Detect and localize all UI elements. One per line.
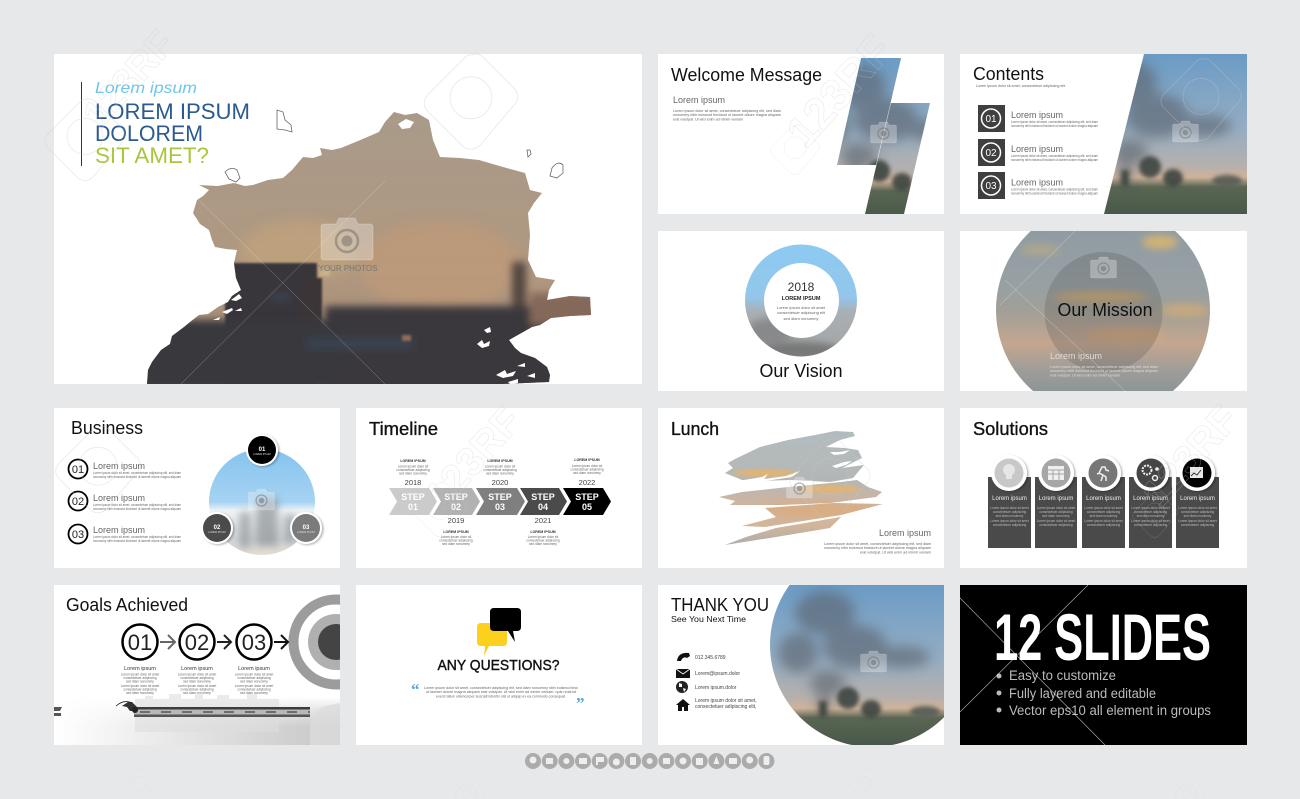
quote text: ut laoreet dolore magna aliquam erat volutpat. Ut wisi enim ad minim veniam, quis nostrud: [426, 690, 576, 694]
icon: camera placeholder: [248, 489, 274, 510]
panel: our mission: [960, 225, 1247, 395]
goal 02: Lorem ipsum dolor sit amet: [178, 684, 216, 688]
node 03: 03: [303, 525, 310, 531]
panel: contents: [960, 54, 1247, 214]
column 5: [1176, 455, 1219, 548]
target graphic: [288, 594, 340, 690]
step 4 arrow: STEP: [531, 492, 555, 502]
heading: ANY QUESTIONS?: [438, 658, 560, 674]
list item 01: [68, 460, 181, 479]
column 1: consectetuer adipiscing: [993, 523, 1026, 527]
contact: website: [676, 681, 737, 693]
photo circle: [770, 585, 944, 745]
column 1: sed diam nonummy: [996, 514, 1024, 518]
watermark lines: [1000, 231, 1125, 391]
step 4 arrow: 04: [538, 502, 548, 512]
column 3: Lorem ipsum dolor sit amet: [1084, 519, 1123, 523]
panel: 12 slides: [960, 585, 1247, 745]
panel: timeline: [356, 408, 642, 568]
goal 02: consectetuer adipiscing: [180, 688, 214, 692]
goal 01: sed diam nonummy: [126, 680, 154, 684]
goal 03: Lorem ipsum dolor sit amet: [235, 684, 273, 688]
list item 02: 02: [72, 496, 84, 508]
goal 03: [235, 624, 288, 695]
watermark: outer stamps: [124, 769, 1206, 799]
icon: speech bubbles: [477, 608, 521, 656]
column 1: [988, 455, 1031, 548]
heading: Our Vision: [760, 361, 842, 381]
icon: camera placeholder: [1172, 121, 1198, 142]
icon: camera placeholder: [1090, 257, 1116, 278]
milestone 2019: LOREM IPSUM: [443, 530, 469, 534]
subheading: Lorem ipsum: [673, 95, 725, 105]
column 3: consectetuer adipiscing: [1087, 510, 1120, 514]
body text: erat volutpat. Ut wisi enim ad minim veniam: [1050, 374, 1120, 378]
inner dark circle: [1044, 252, 1162, 372]
goal 02: [178, 624, 231, 695]
body text: consectetuer adipiscing elit: [777, 310, 826, 315]
column 4: Lorem ipsum dolor sit amet: [1131, 506, 1170, 510]
item 03: nonummy nibh euismod tincidunt ut laoreet dolore magna aliquam: [1011, 192, 1098, 196]
watermark: title slide stamp: 123RF: [75, 23, 183, 136]
column 2: consectetuer adipiscing: [1039, 523, 1073, 527]
list item 01: Lorem ipsum: [93, 461, 145, 471]
heading: THANK YOU: [671, 595, 769, 615]
list item 01: 01: [72, 464, 84, 476]
column 1: Lorem ipsum dolor sit amet: [990, 506, 1029, 510]
column 5: sed diam nonummy: [1184, 514, 1212, 518]
panel: main title slide: [54, 54, 642, 396]
column 4: Lorem ipsum dolor sit amet: [1131, 519, 1170, 523]
item 02: Lorem ipsum: [1011, 144, 1063, 154]
node 02: LOREM IPSUM: [208, 531, 226, 534]
list item 03: nonummy nibh euismod tincidunt ut laoreet dolore magna aliquam: [93, 539, 181, 543]
milestone 2021: [526, 516, 560, 546]
heading: Business: [71, 418, 143, 438]
milestone 2022: LOREM IPSUM: [574, 458, 600, 462]
milestone 2018: sed diam nonummy: [399, 472, 427, 476]
quote text: exerci tation ullamcorper suscipit lobortis nisl ut aliquip ex ea commodo consequat.: [436, 694, 566, 698]
watermark: top right stamps: [770, 26, 1241, 175]
heading: Contents: [973, 64, 1044, 84]
step 3 arrow: [476, 488, 525, 515]
panel: goals achieved: [54, 585, 340, 745]
photo circle: [996, 231, 1210, 391]
column 5: Lorem ipsum: [1180, 496, 1215, 502]
list item 01: nonummy nibh euismod tincidunt ut laoreet dolore magna aliquam: [93, 475, 181, 479]
step 2 arrow: STEP: [444, 492, 468, 502]
goal 03: consectetuer adipiscing: [237, 676, 271, 680]
body text: [824, 542, 931, 554]
goal 03: sed diam nonummy: [240, 691, 268, 695]
goal 02: consectetuer adipiscing: [180, 676, 214, 680]
column 5: Lorem ipsum dolor sit amet: [1178, 519, 1217, 523]
node 02: 02: [214, 525, 221, 531]
watermark: middle row stamps: 123RF: [417, 399, 530, 518]
milestone 2018: 2018: [405, 478, 421, 487]
column 2: consectetuer adipiscing: [1039, 510, 1073, 514]
node 01: [246, 434, 278, 466]
quote text: [411, 680, 584, 713]
icon row: [525, 753, 774, 769]
body text: nonummy nibh euismod tincidunt ut laoreet dolore magna aliquam: [673, 113, 781, 117]
body text: nonummy nibh euismod tincidunt ut laoreet dolore magna aliquam: [1050, 369, 1158, 373]
icon: camera placeholder: [860, 651, 886, 672]
body text: Lorem ipsum dolor sit amet, consectetuer adipiscing elit, sed diam: [824, 542, 931, 546]
milestone 2020: [483, 459, 517, 487]
goal 03: consectetuer adipiscing: [237, 688, 271, 692]
milestone 2019: consectetuer adipiscing: [439, 538, 473, 542]
goal 01: consectetuer adipiscing: [123, 688, 157, 692]
list item 01: Lorem ipsum dolor sit amet, consectetuer adipiscing elit, sed diam: [93, 471, 181, 475]
column 2: Lorem ipsum dolor sit amet: [1037, 506, 1075, 510]
photo circle: [209, 449, 315, 555]
milestone 2022: Lorem ipsum dolor sit: [572, 464, 602, 468]
contact: address: consectetuer adipiscing elit,: [695, 704, 756, 710]
watermark: middle row stamps: [56, 397, 1247, 538]
contact: email: Lorem@ipsum.dolor: [695, 671, 740, 677]
milestone 2021: sed diam nonummy: [529, 542, 557, 546]
label: LOREM IPSUM: [782, 296, 821, 302]
item 01: Lorem ipsum dolor sit amet, consectetuer adipiscing elit, sed diam: [1011, 120, 1098, 124]
body text: [673, 109, 781, 122]
photo ring: [745, 244, 857, 356]
column 5: consectetuer adipiscing: [1181, 510, 1214, 514]
column 4: [1129, 455, 1172, 548]
photo placeholder label: YOUR PHOTOS: [319, 264, 377, 273]
list item 02: nonummy nibh euismod tincidunt ut laoreet dolore magna aliquam: [93, 507, 181, 511]
body text: Lorem ipsum dolor sit amet: [777, 305, 826, 310]
subheading: See You Next Time: [671, 614, 746, 624]
list item 03: [68, 524, 181, 544]
item 02: [978, 139, 1098, 166]
list item 03: 03: [72, 529, 84, 541]
heading: Timeline: [369, 419, 438, 439]
milestone 2021: Lorem ipsum dolor sit: [528, 535, 558, 539]
milestone 2020: consectetuer adipiscing: [483, 468, 517, 472]
panel: business: [54, 408, 340, 568]
photo strips: [837, 56, 930, 214]
car: [116, 702, 138, 713]
watermark: top right stamps: 123RF: [777, 26, 902, 157]
item 01: nonummy nibh euismod tincidunt ut laoreet dolore magna aliquam: [1011, 124, 1098, 128]
photo wedge: [1104, 54, 1247, 214]
column 5: consectetuer adipiscing: [1181, 523, 1214, 527]
column 1: Lorem ipsum: [992, 496, 1027, 502]
milestone 2022: sed diam nonummy: [573, 471, 601, 475]
column 5: Lorem ipsum dolor sit amet: [1178, 506, 1217, 510]
column 3: consectetuer adipiscing: [1087, 523, 1120, 527]
milestone 2019: sed diam nonummy: [442, 542, 470, 546]
title text block: [81, 80, 250, 168]
column 3: Lorem ipsum dolor sit amet: [1084, 506, 1123, 510]
heading: Goals Achieved: [66, 595, 188, 615]
milestone 2020: Lorem ipsum dolor sit: [485, 464, 515, 468]
step 4 arrow: [520, 488, 567, 515]
item 02: 02: [985, 148, 997, 159]
column 4: consectetuer adipiscing: [1134, 523, 1167, 527]
icon: camera placeholder: [321, 218, 373, 260]
node 03: [290, 512, 322, 544]
watermark lines: [181, 181, 385, 384]
milestone 2019: [439, 516, 473, 546]
node 02: [201, 512, 233, 544]
step 2 arrow: 02: [451, 502, 461, 512]
step 1 arrow: 01: [408, 502, 418, 512]
panel: our vision: [658, 231, 944, 391]
column 2: Lorem ipsum dolor sit amet: [1037, 519, 1075, 523]
goal 02: 02: [185, 630, 209, 655]
watermark lines: [960, 585, 1105, 745]
contact: email: [676, 669, 740, 678]
step 1 arrow: [389, 488, 437, 515]
item 02: nonummy nibh euismod tincidunt ut laoreet dolore magna aliquam: [1011, 158, 1098, 162]
column 2: [1035, 455, 1077, 548]
brush photo: [715, 430, 890, 548]
step 3 arrow: 03: [495, 502, 505, 512]
milestone 2018: consectetuer adipiscing: [396, 468, 430, 472]
title text block: LOREM IPSUM: [95, 99, 250, 124]
column 2: Lorem ipsum: [1039, 496, 1073, 502]
milestone 2020: 2020: [492, 478, 508, 487]
quote text: “: [411, 680, 420, 699]
goal 03: Lorem ipsum: [238, 666, 270, 672]
body text: erat volutpat. Ut wisi enim ad minim veniam: [673, 118, 743, 122]
item 01: 01: [985, 114, 997, 125]
column 4: consectetuer adipiscing: [1134, 510, 1167, 514]
goal 01: Lorem ipsum dolor sit amet: [121, 672, 159, 676]
heading: Welcome Message: [671, 65, 822, 85]
body text: erat volutpat. Ut wisi enim ad minim veniam: [860, 550, 931, 554]
panel: thank you: [658, 585, 944, 745]
goal 01: 01: [128, 630, 152, 655]
item 03: [978, 172, 1098, 199]
list item 03: Lorem ipsum: [93, 525, 145, 535]
subtitle: Lorem ipsum dolor sit amet, consectetuer adipiscing elit.: [976, 84, 1066, 88]
column 3: [1082, 455, 1125, 548]
node 03: LOREM IPSUM: [297, 531, 315, 534]
milestone 2018: [396, 459, 430, 487]
heading: Lunch: [671, 419, 719, 439]
column 1: Lorem ipsum dolor sit amet: [990, 519, 1029, 523]
milestone 2021: 2021: [535, 516, 551, 525]
body text: Lorem ipsum dolor sit amet, consectetuer adipiscing elit, sed diam: [673, 109, 781, 113]
milestone 2019: 2019: [448, 516, 464, 525]
panel: solutions: [960, 408, 1247, 568]
item 03: Lorem ipsum: [1011, 178, 1063, 188]
goal 01: sed diam nonummy: [126, 691, 154, 695]
quote text: Lorem ipsum dolor sit amet, consectetuer adipiscing elit, sed diam nonummy nibh euismod tinci: [424, 686, 578, 690]
contact: address: Lorem ipsum dolor sit amet,: [695, 698, 757, 704]
quote text: ”: [576, 694, 584, 713]
heading: Solutions: [973, 419, 1048, 439]
item 02: Lorem ipsum dolor sit amet, consectetuer adipiscing elit, sed diam: [1011, 154, 1098, 158]
title text block: DOLOREM: [95, 121, 203, 146]
item 03: Lorem ipsum dolor sit amet, consectetuer adipiscing elit, sed diam: [1011, 188, 1098, 192]
watermark: title slide stamp: [45, 23, 518, 181]
milestone 2022: [570, 458, 604, 487]
milestone 2021: LOREM IPSUM: [530, 530, 556, 534]
bullet list: [996, 668, 1211, 718]
year: 2018: [788, 280, 815, 294]
list item 02: Lorem ipsum: [93, 493, 145, 503]
column 4: sed diam nonummy: [1137, 514, 1165, 518]
column 4: Lorem ipsum: [1133, 496, 1168, 502]
step 5 arrow: 05: [582, 502, 592, 512]
milestone 2021: consectetuer adipiscing: [526, 538, 560, 542]
step 5 arrow: [563, 488, 611, 515]
node 01: 01: [259, 447, 266, 453]
panel: any questions: [356, 585, 642, 745]
body text: [777, 305, 826, 321]
item 01: [978, 105, 1098, 132]
splash texture: [213, 294, 535, 384]
list item 03: Lorem ipsum dolor sit amet, consectetuer adipiscing elit, sed diam: [93, 535, 181, 539]
panel: welcome message: [658, 54, 944, 214]
milestone 2019: Lorem ipsum dolor sit: [441, 535, 471, 539]
step 1 arrow: STEP: [401, 492, 425, 502]
goal 03: Lorem ipsum dolor sit amet: [235, 672, 273, 676]
subheading: Lorem ipsum: [879, 528, 931, 538]
splash specks: [225, 110, 563, 182]
node 01: LOREM IPSUM: [253, 453, 271, 456]
goal 01: consectetuer adipiscing: [123, 676, 157, 680]
body text: Lorem ipsum dolor sit amet, consectetuer adipiscing elit, sed diam: [1050, 365, 1158, 369]
milestone 2018: LOREM IPSUM: [400, 459, 426, 463]
goal 03: sed diam nonummy: [240, 680, 268, 684]
photo splash: [147, 112, 591, 384]
step 2 arrow: [433, 488, 480, 515]
column 1: consectetuer adipiscing: [993, 510, 1026, 514]
milestone 2020: sed diam nonummy: [486, 472, 514, 476]
goal 03: 03: [242, 630, 266, 655]
brush cuts: [738, 450, 852, 483]
milestone 2018: Lorem ipsum dolor sit: [398, 464, 428, 468]
milestone 2022: 2022: [579, 478, 595, 487]
contact: website: Lorem ipsum.dolor: [695, 685, 737, 691]
icon: camera placeholder: [786, 477, 812, 498]
step 5 arrow: STEP: [575, 492, 599, 502]
contact: phone: [677, 653, 726, 661]
goal 02: sed diam nonummy: [183, 691, 211, 695]
title text block: SIT AMET?: [95, 143, 209, 168]
goal 01: Lorem ipsum dolor sit amet: [121, 684, 159, 688]
item 01: Lorem ipsum: [1011, 110, 1063, 120]
step 3 arrow: STEP: [488, 492, 512, 502]
body text: nonummy nibh euismod tincidunt ut laoreet dolore magna aliquam: [824, 546, 931, 550]
body text: [1050, 365, 1158, 378]
watermark: middle row stamps: 123RF: [1134, 397, 1247, 516]
road scene: [54, 693, 340, 745]
column 2: sed diam nonummy: [1042, 514, 1070, 518]
contact: phone: 012.345.6789: [695, 655, 726, 661]
title text block: Lorem ipsum: [95, 80, 197, 97]
goal 02: Lorem ipsum: [181, 666, 213, 672]
goal 02: Lorem ipsum dolor sit amet: [178, 672, 216, 676]
body text: sed diam nonummy: [784, 316, 818, 321]
list item 02: [68, 492, 181, 511]
subheading: Lorem ipsum: [1050, 351, 1102, 361]
icon: camera placeholder: [870, 122, 896, 143]
goal 01: Lorem ipsum: [124, 666, 156, 672]
bullet list: Vector eps10 all element in groups: [1009, 703, 1211, 718]
goal 01: [121, 624, 175, 695]
column 3: Lorem ipsum: [1086, 496, 1121, 502]
column 3: sed diam nonummy: [1090, 514, 1118, 518]
milestone 2020: LOREM IPSUM: [487, 459, 513, 463]
goal 02: sed diam nonummy: [183, 680, 211, 684]
contact: address: [676, 698, 757, 711]
bullet list: Fully layered and editable: [1009, 686, 1156, 701]
heading: Our Mission: [1058, 300, 1152, 320]
milestone 2022: consectetuer adipiscing: [570, 468, 604, 472]
item 03: 03: [985, 181, 997, 192]
bullet list: Easy to customize: [1009, 668, 1116, 683]
list item 02: Lorem ipsum dolor sit amet, consectetuer adipiscing elit, sed diam: [93, 503, 181, 507]
panel: lunch: [658, 408, 944, 568]
